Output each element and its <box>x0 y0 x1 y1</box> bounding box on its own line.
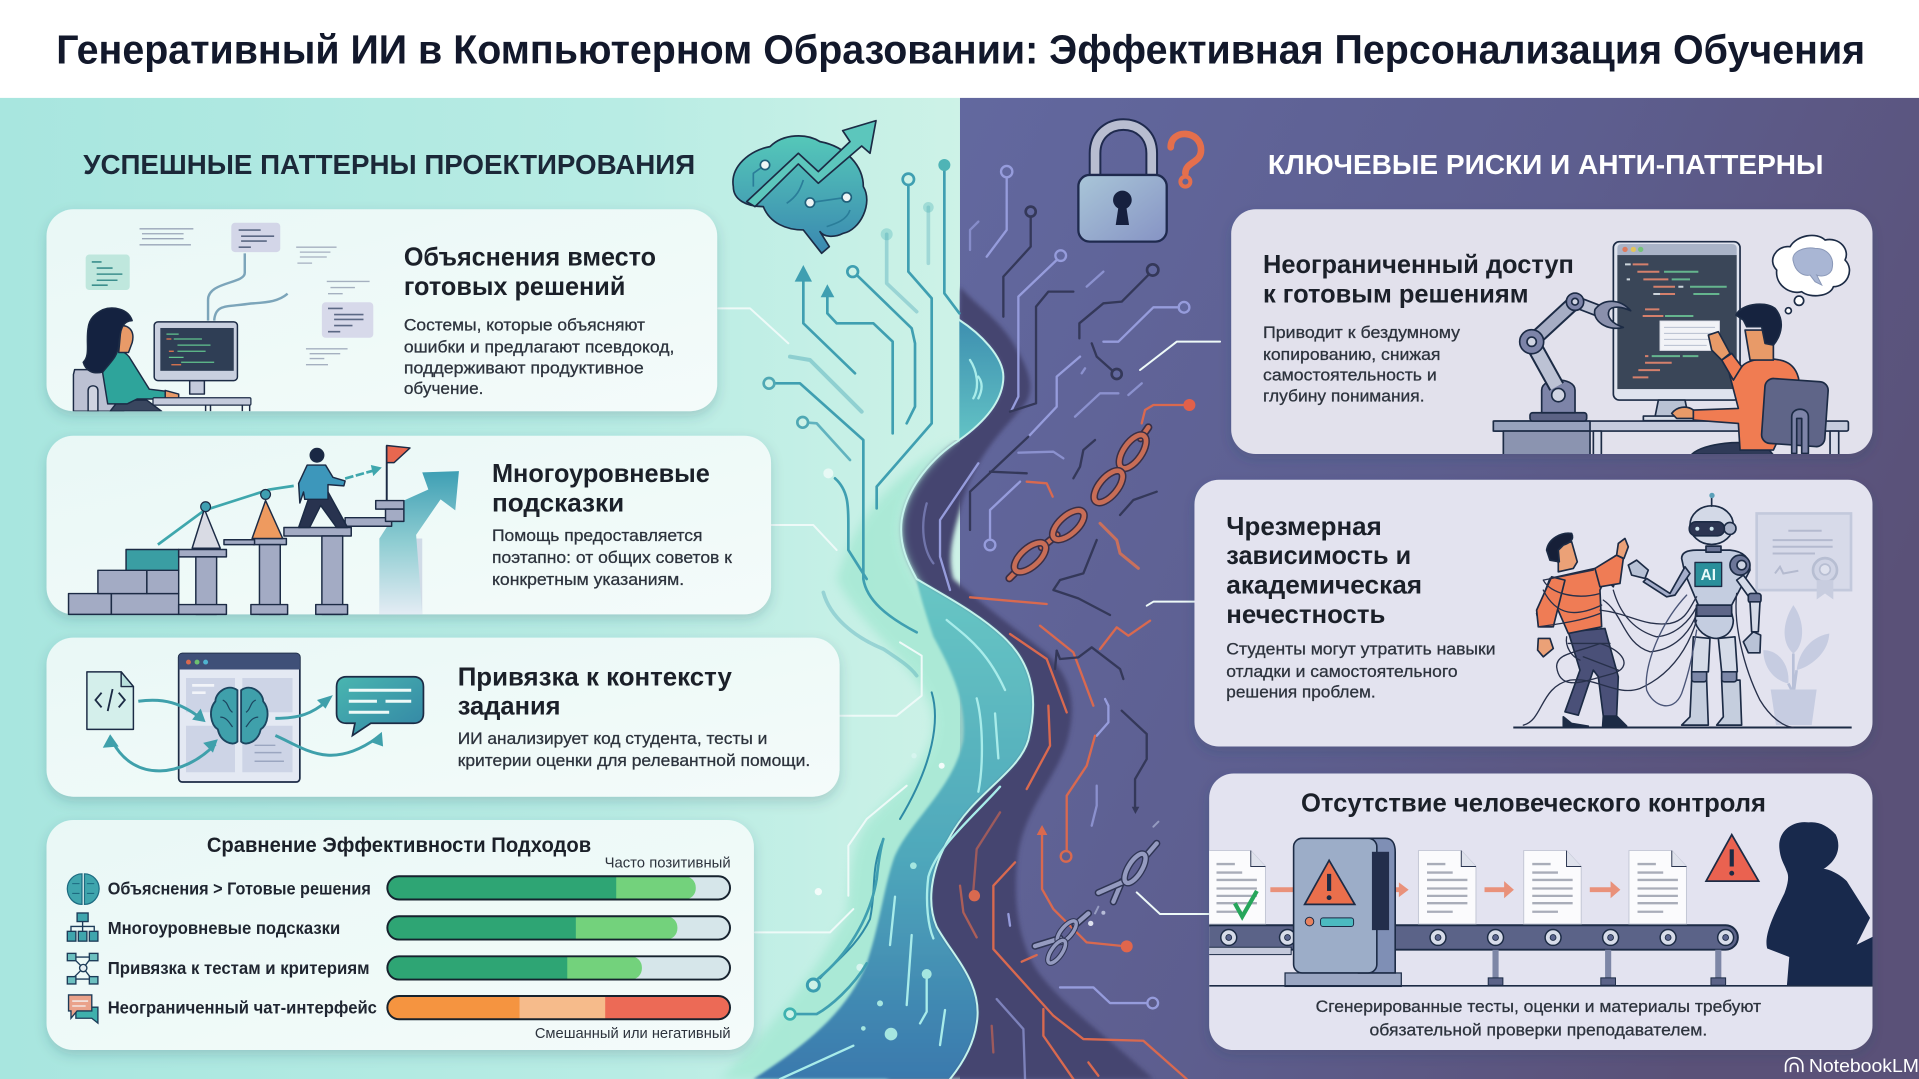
card caption: обязательной проверки преподавателем. <box>1369 1020 1707 1039</box>
card title: Привязка к контексту <box>458 661 732 691</box>
documents <box>1208 851 1686 924</box>
card text: конкретным указаниям. <box>492 570 684 589</box>
broken chain: orange <box>1009 427 1151 578</box>
AI chip label: AI <box>1701 567 1716 584</box>
central river and circuit divider <box>718 121 1220 1079</box>
panel: assignment context <box>47 638 840 797</box>
card title: Отсутствие человеческого контроля <box>1301 787 1766 817</box>
broken chain: grey <box>1035 822 1158 966</box>
card text: Состемы, которые объясняют <box>404 315 645 334</box>
card title <box>1226 511 1422 629</box>
faded plant <box>1763 605 1829 725</box>
panel: unlimited access <box>1231 209 1872 458</box>
bar row: explanations: Объяснения > Готовые решения <box>108 879 371 899</box>
connectors from positive cards <box>718 308 922 932</box>
label: mixed or negative: Смешанный или негативный <box>535 1026 731 1042</box>
card title: академическая <box>1226 570 1422 600</box>
card caption: Сгенерированные тесты, оценки и материалы требуют <box>1316 997 1762 1016</box>
card text: критерии оценки для релевантной помощи. <box>458 751 810 770</box>
card text: ошибки и предлагают псевдокод, <box>404 337 674 356</box>
illustration: document conveyor and reviewer <box>1199 822 1874 986</box>
dark band beside river <box>887 287 1153 1079</box>
card title <box>492 458 710 518</box>
panel: multilevel hints <box>47 436 771 614</box>
warning sign <box>1706 835 1759 881</box>
illustration: robot arm and student at monitor <box>1493 235 1849 458</box>
conveyor <box>1199 925 1738 985</box>
card text: отладки и самостоятельного <box>1226 662 1458 681</box>
mint veil <box>720 437 987 1079</box>
card title <box>404 242 656 301</box>
title band <box>0 0 1919 98</box>
card title: Чрезмерная <box>1226 511 1382 541</box>
connectors from risk cards <box>1137 342 1220 914</box>
chart title: Сравнение Эффективности Подходов <box>207 834 591 857</box>
illustration: stairs and climber <box>69 445 459 614</box>
card text: Приводит к бездумному <box>1263 323 1461 342</box>
card title: задания <box>458 691 561 721</box>
card text <box>492 526 733 589</box>
card title: Неограниченный доступ <box>1263 249 1574 279</box>
illustration: code file, brain and chat <box>87 654 423 782</box>
teal river <box>753 579 1033 1079</box>
reviewer silhouette <box>1766 822 1874 986</box>
floor line <box>1209 985 1872 987</box>
risk circuits: upper <box>923 166 1195 615</box>
process arrows <box>1270 881 1620 898</box>
card title: подсказки <box>492 488 624 518</box>
NotebookLM watermark: NotebookLM <box>1809 1055 1919 1076</box>
teal lobe <box>959 320 1003 440</box>
icon: brain <box>67 874 99 904</box>
label: often positive: Часто позитивный <box>605 856 731 872</box>
bar row: unlimited chat: Неограниченный чат-интерфейс <box>108 997 377 1017</box>
heading: design patterns: УСПЕШНЫЕ ПАТТЕРНЫ ПРОЕКТИРОВАНИЯ <box>83 149 695 180</box>
icon: hierarchy <box>67 913 98 941</box>
card text: поэтапно: от общих советов к <box>492 548 733 567</box>
card title: нечестность <box>1226 599 1385 629</box>
bar row: explanations <box>67 874 730 904</box>
card title: к готовым решениям <box>1263 278 1529 308</box>
card text: поддерживают продуктивное <box>404 358 644 377</box>
icon: network <box>67 953 98 984</box>
card title <box>1263 249 1574 308</box>
card text <box>1263 323 1461 405</box>
card title <box>458 661 732 721</box>
card text: копированию, снижая <box>1263 345 1440 364</box>
bar row: tests and criteria <box>67 953 730 984</box>
card title: зависимость и <box>1226 540 1411 570</box>
bar row: multilevel hints: Многоуровневые подсказки <box>108 918 340 938</box>
title: Генеративный ИИ в Компьютерном Образовании: Эффективная Персонализация Обучения <box>56 27 1865 73</box>
background: risk side <box>960 98 1919 1079</box>
card text: обучение. <box>404 379 483 398</box>
card text: глубину понимания. <box>1263 386 1425 405</box>
panel: lack of human control <box>1199 773 1874 1050</box>
card text: самостоятельность и <box>1263 366 1437 385</box>
card caption <box>1316 997 1762 1039</box>
card title: Многоуровневые <box>492 458 710 488</box>
panel: explanations instead of solutions <box>47 209 717 411</box>
card text <box>1226 640 1496 702</box>
robot <box>1628 497 1761 725</box>
illustration: student with code notes <box>73 223 373 411</box>
bar row: multilevel hints <box>67 913 730 941</box>
river streaks <box>780 360 1005 1079</box>
generating machine <box>1285 838 1401 986</box>
icon: chat <box>69 995 98 1023</box>
icon: padlock with question mark <box>1078 125 1201 242</box>
card title: готовых решений <box>404 271 625 301</box>
card title: Объяснения вместо <box>404 242 656 272</box>
risk circuits: lower <box>960 597 1187 1079</box>
person climbing <box>299 449 348 527</box>
card text: решения проблем. <box>1226 683 1376 702</box>
bar row: unlimited chat <box>69 995 730 1023</box>
floor <box>1513 724 1852 730</box>
faded certificate <box>1757 513 1851 599</box>
card text <box>458 729 810 770</box>
panel: effectiveness comparison chart <box>47 820 754 1050</box>
card text: Помощь предоставляется <box>492 526 702 545</box>
card text <box>404 315 674 398</box>
icon: brain with growth arrow <box>733 121 876 253</box>
card text: Студенты могут утратить навыки <box>1226 640 1496 659</box>
student <box>1537 533 1628 726</box>
river edge highlights <box>901 320 1033 1079</box>
background: positive side <box>0 98 960 1079</box>
tangled wires <box>1523 570 1793 727</box>
bar row: tests and criteria: Привязка к тестам и критериям <box>108 958 370 978</box>
panel: overdependence and academic dishonesty <box>1194 480 1872 747</box>
teal circuits on positive side <box>764 159 959 1019</box>
card text: ИИ анализирует код студента, тесты и <box>458 729 767 748</box>
heading: risks: КЛЮЧЕВЫЕ РИСКИ И АНТИ-ПАТТЕРНЫ <box>1268 149 1824 180</box>
illustration: student tangled with AI robot <box>1513 493 1852 727</box>
